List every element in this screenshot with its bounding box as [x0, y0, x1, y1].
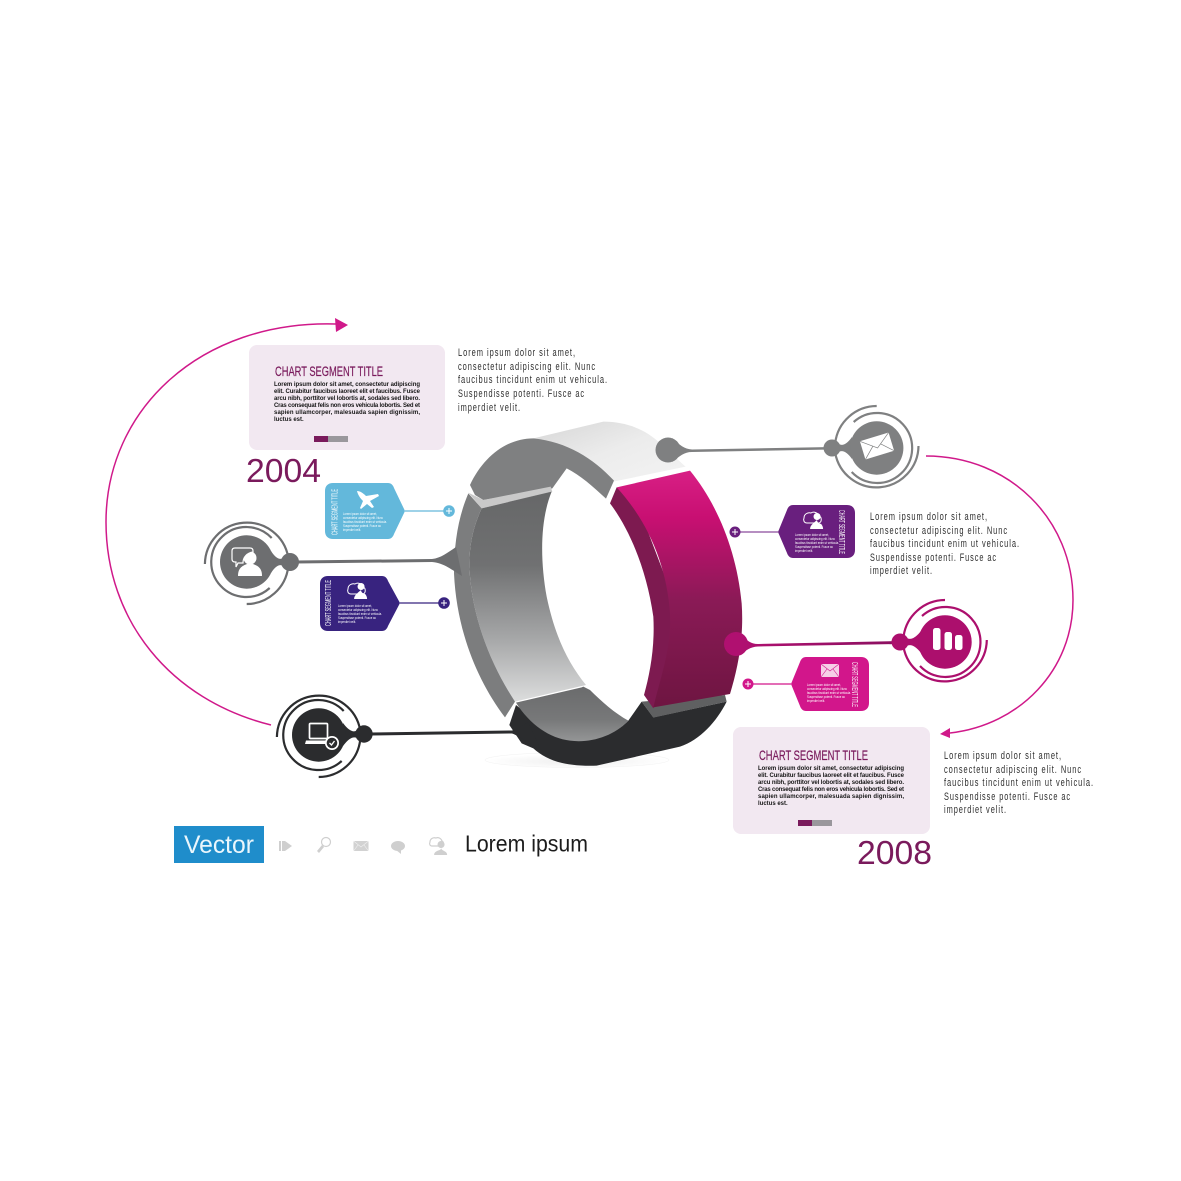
- text block: bottom right description: Lorem ipsum dolor sit amet,: [944, 750, 1062, 762]
- tag: pink envelope: consectetur adipiscing elit. Nunc: [807, 687, 847, 691]
- segment: top-left grey face: [470, 438, 614, 500]
- heading: card title: CHART SEGMENT TITLE: [275, 363, 383, 379]
- segment: left rim: [454, 493, 515, 717]
- text block: card body: Cras consequat felis non eros vehicula lobortis. Sed et: [274, 403, 420, 409]
- 3D ring chart: [454, 422, 742, 766]
- tag: navy person: CHART SEGMENT TITLE: [324, 580, 333, 626]
- icon: envelope: [835, 406, 918, 487]
- text block: right description: consectetur adipiscing elit. Nunc: [870, 525, 1008, 537]
- text block: top description: [458, 347, 608, 414]
- text block: card body: sapien ullamcorper, malesuada sapien dignissim,: [274, 410, 420, 416]
- progress bar: [314, 436, 348, 442]
- text block: card body: elit. Curabitur faucibus laoreet elit et faucibus. Fusce: [758, 773, 905, 779]
- badge: Vector: Vector: [184, 831, 254, 859]
- text block: card body: [274, 382, 421, 423]
- tag: purple cloud: [730, 505, 855, 558]
- text block: bottom right description: Suspendisse potenti. Fusce ac: [944, 791, 1071, 803]
- ring shadow: [485, 752, 669, 768]
- tag: blue plane: consectetur adipiscing elit. Nunc: [343, 516, 383, 520]
- text block: card body: sapien ullamcorper, malesuada sapien dignissim,: [758, 794, 904, 800]
- text block: right description: Suspendisse potenti. Fusce ac: [870, 552, 997, 564]
- tag: purple cloud: Suspendisse potenti. Fusce ac: [795, 545, 833, 549]
- icon: bar chart: [904, 600, 987, 681]
- tag: navy person: Lorem ipsum dolor sit amet,: [338, 604, 372, 608]
- icon row: grey toolbar: [279, 838, 447, 855]
- segment: left inner surface: [469, 492, 586, 702]
- icon: person with speech bubble: [205, 523, 288, 604]
- year 2004: 2004: [246, 452, 321, 489]
- text block: card body: [758, 766, 905, 807]
- text block: top description: Suspendisse potenti. Fusce ac: [458, 388, 585, 400]
- connector: light grey envelope: [656, 437, 852, 462]
- text block: right description: Lorem ipsum dolor sit amet,: [870, 511, 988, 523]
- tag: purple cloud: faucibus tincidunt enim ut vehicula.: [795, 541, 839, 545]
- tag: navy person: [320, 576, 450, 631]
- tag: pink envelope: [742, 657, 869, 711]
- connector: black laptop: [343, 722, 540, 748]
- text block: card body: Lorem ipsum dolor sit amet, consectetur adipiscing: [274, 382, 420, 388]
- tag: navy person: Suspendisse potenti. Fusce ac: [338, 616, 376, 620]
- panel: 2004 chart segment card: [249, 345, 445, 450]
- right timeline arc with arrow: [926, 456, 1073, 738]
- segment: top light outer surface: [533, 422, 686, 482]
- progress bar: [798, 820, 832, 826]
- segment: bottom dark: [509, 702, 727, 766]
- year 2008: 2008: [857, 834, 932, 871]
- left timeline arc with arrow: [106, 318, 348, 725]
- tag: purple cloud: CHART SEGMENT TITLE: [837, 510, 846, 554]
- tag: purple cloud: Lorem ipsum dolor sit amet,: [795, 533, 829, 537]
- text block: bottom right description: imperdiet velit.: [944, 804, 1007, 816]
- text block: card body: arcu nibh, porttitor vel lobortis at, sodales sed libero.: [274, 396, 420, 402]
- text block: card body: Lorem ipsum dolor sit amet, consectetur adipiscing: [758, 766, 904, 772]
- tag: pink envelope: faucibus tincidunt enim ut vehicula.: [807, 691, 851, 695]
- icon: cloud person: [348, 583, 367, 599]
- text block: top description: imperdiet velit.: [458, 402, 521, 414]
- tag: purple cloud: imperdiet velit.: [795, 549, 813, 553]
- text block: right description: imperdiet velit.: [870, 565, 933, 577]
- text block: card body: luctus est.: [274, 417, 304, 423]
- text block: bottom right description: consectetur adipiscing elit. Nunc: [944, 764, 1082, 776]
- icon: laptop with check: [277, 696, 360, 777]
- text block: top description: consectetur adipiscing elit. Nunc: [458, 361, 596, 373]
- segment: magenta front: [617, 471, 742, 707]
- tag: pink envelope: Suspendisse potenti. Fusce ac: [807, 695, 845, 699]
- tag: blue plane: Suspendisse potenti. Fusce ac: [343, 524, 381, 528]
- tag: blue plane: Lorem ipsum dolor sit amet,: [343, 512, 377, 516]
- tag: navy person: faucibus tincidunt enim ut vehicula.: [338, 612, 382, 616]
- segment: bottom grey inner: [516, 687, 628, 741]
- text block: card body: arcu nibh, porttitor vel lobortis at, sodales sed libero.: [758, 780, 904, 786]
- badge: Vector: [174, 826, 264, 863]
- text block: right description: faucibus tincidunt enim ut vehicula.: [870, 538, 1020, 550]
- tag: navy person: imperdiet velit.: [338, 620, 356, 624]
- icon: cloud person: [804, 512, 823, 529]
- icon: plane: [357, 491, 379, 509]
- segment: magenta side: [610, 487, 687, 708]
- text block: right description: [870, 511, 1020, 577]
- bottom strip: [642, 695, 727, 718]
- text block: bottom right description: [944, 750, 1094, 816]
- tag: navy person: consectetur adipiscing elit. Nunc: [338, 608, 378, 612]
- connector: magenta bars: [724, 631, 921, 656]
- caption: Lorem ipsum: Lorem ipsum: [465, 830, 588, 856]
- tag: purple cloud: consectetur adipiscing elit. Nunc: [795, 537, 835, 541]
- text block: top description: Lorem ipsum dolor sit amet,: [458, 347, 576, 359]
- tag: pink envelope: Lorem ipsum dolor sit amet,: [807, 683, 841, 687]
- top light strip: [468, 487, 552, 508]
- tag: blue plane: faucibus tincidunt enim ut vehicula.: [343, 520, 387, 524]
- tag: blue plane: imperdiet velit.: [343, 528, 361, 532]
- text block: card body: luctus est.: [758, 801, 788, 807]
- text block: bottom right description: faucibus tincidunt enim ut vehicula.: [944, 777, 1094, 789]
- connector: grey person: [271, 547, 462, 576]
- tag: pink envelope: imperdiet velit.: [807, 699, 825, 703]
- heading: card title: CHART SEGMENT TITLE: [759, 747, 868, 763]
- text block: card body: elit. Curabitur faucibus laoreet elit et faucibus. Fusce: [274, 389, 421, 395]
- tag: blue plane: CHART SEGMENT TITLE: [330, 489, 340, 535]
- text block: card body: Cras consequat felis non eros vehicula lobortis. Sed et: [758, 787, 904, 793]
- tag: blue plane: [325, 483, 455, 539]
- icon: envelope: [821, 664, 839, 677]
- panel: 2008 chart segment card: [733, 727, 930, 834]
- text block: top description: faucibus tincidunt enim ut vehicula.: [458, 374, 608, 386]
- tag: pink envelope: CHART SEGMENT TITLE: [850, 662, 859, 707]
